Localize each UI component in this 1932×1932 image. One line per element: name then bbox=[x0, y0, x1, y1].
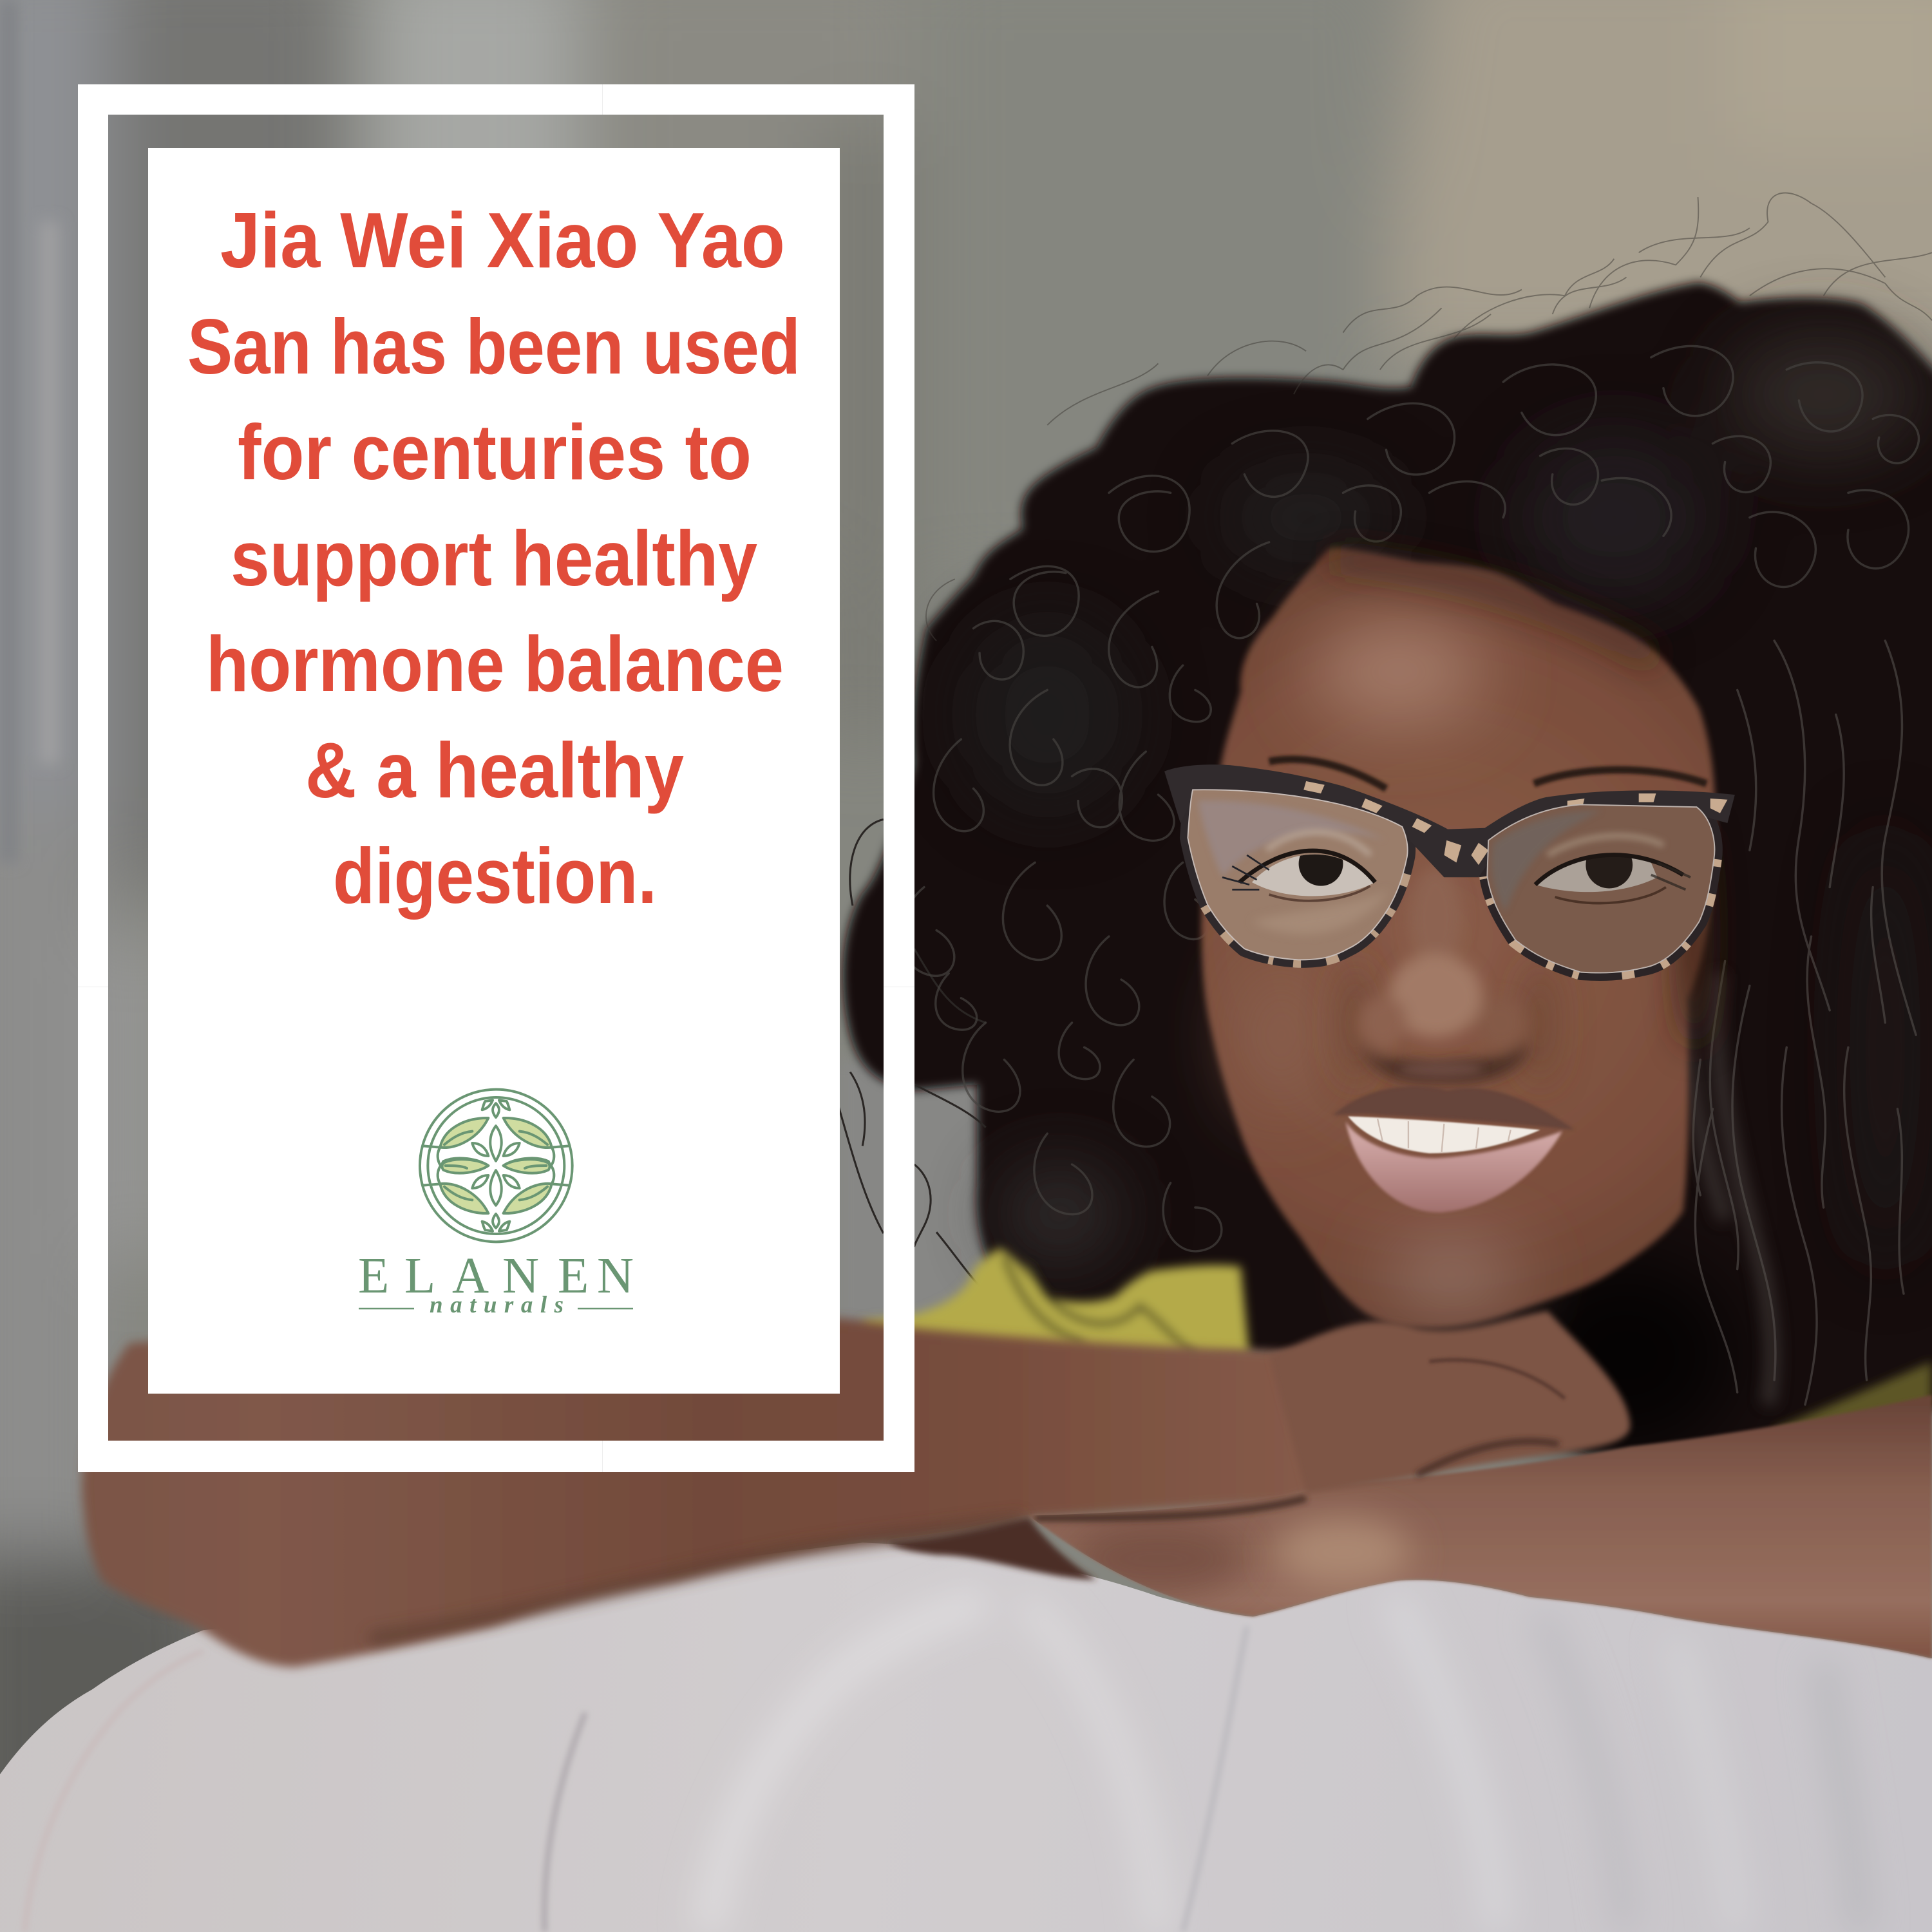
eyebrows bbox=[1269, 759, 1707, 788]
logo rules bbox=[359, 1308, 633, 1309]
face bbox=[1164, 548, 1735, 1328]
mouth bbox=[1333, 1086, 1575, 1213]
tortoise flecks on frame bbox=[1303, 781, 1727, 865]
headline text: & a healthy bbox=[305, 726, 684, 814]
left eye bbox=[1222, 832, 1375, 901]
left lens rim bbox=[1188, 790, 1408, 960]
right forearm and hand bbox=[1029, 1395, 1932, 1658]
long wavy strands on right bbox=[1693, 641, 1916, 1405]
fingers under arm bbox=[887, 1518, 1097, 1580]
headline text: digestion. bbox=[333, 832, 657, 920]
yellow shirt bbox=[862, 1248, 1932, 1448]
sofa cushion bbox=[0, 1542, 1932, 1932]
headline text: San has been used bbox=[187, 303, 800, 390]
hand under chin bbox=[1269, 1311, 1630, 1493]
headline text: Jia Wei Xiao Yao bbox=[220, 196, 785, 284]
logo emblem bbox=[420, 1090, 573, 1242]
curl strands bbox=[901, 346, 1918, 1251]
logo wordmark: ELANEN bbox=[358, 1248, 634, 1304]
left arm bbox=[82, 1318, 1356, 1667]
headline text: hormone balance bbox=[206, 620, 784, 708]
right lens rim bbox=[1487, 804, 1714, 973]
sofa folds bbox=[708, 1596, 1861, 1932]
face highlights and shadows bbox=[1244, 622, 1519, 1305]
hair strands over shirt bbox=[1004, 1257, 1195, 1353]
headline text: for centuries to bbox=[238, 408, 752, 496]
wall patch at lower left of hair bbox=[838, 1059, 1010, 1331]
hair black under chin and tone blobs bbox=[961, 333, 1922, 1454]
logo tagline: naturals bbox=[430, 1292, 564, 1318]
hair mass bbox=[838, 193, 1932, 1454]
frizz above hair bbox=[926, 193, 1932, 641]
frame top bars and bridge bbox=[1164, 764, 1735, 877]
glasses bbox=[1164, 764, 1735, 973]
frizz band right of face bbox=[1687, 973, 1772, 1405]
nose bbox=[1358, 866, 1528, 1082]
headline text bbox=[187, 196, 800, 920]
stray curls at lower left over wall bbox=[838, 819, 1035, 1325]
logo: Elanen Naturals bbox=[358, 1090, 634, 1318]
white text panel bbox=[148, 148, 840, 1394]
headline text: support healthy bbox=[231, 515, 757, 602]
arm lower shadow bbox=[370, 1520, 1023, 1639]
white outer frame bbox=[78, 84, 914, 1472]
right lens bbox=[1487, 804, 1714, 973]
right eye bbox=[1535, 836, 1690, 904]
left lens bbox=[1188, 790, 1408, 960]
